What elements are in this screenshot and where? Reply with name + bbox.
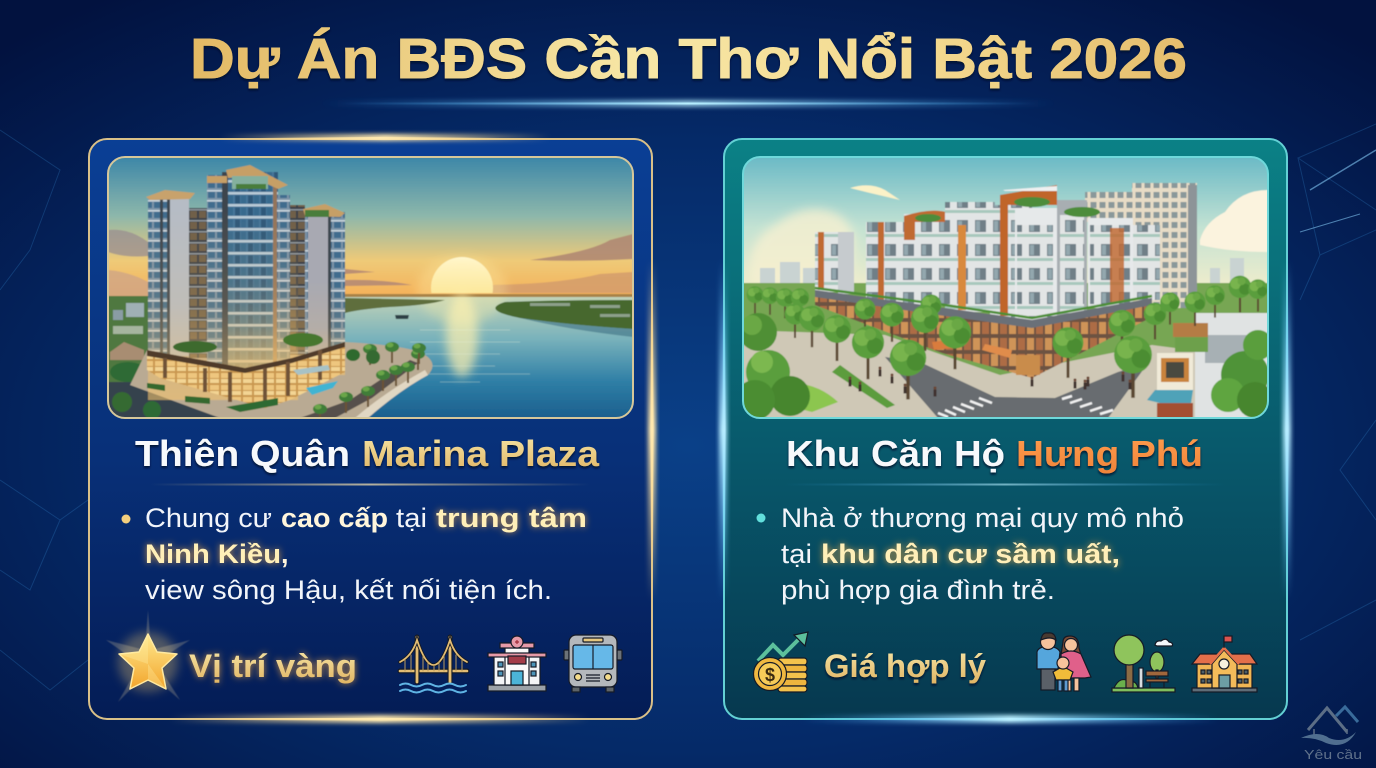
panel: Thiên Quân Marina Plaza <box>89 134 656 723</box>
icon: star <box>106 610 190 702</box>
foreground trees <box>739 313 777 351</box>
right facade blocks <box>1130 225 1160 300</box>
bullet text: tại <box>781 539 812 569</box>
pavement and road <box>744 330 1196 417</box>
bullet text: view sông Hậu, kết nối tiện ích. <box>145 575 552 605</box>
heading underline <box>150 484 590 486</box>
title: Dự Án BĐS Cần Thơ Nổi Bật 2026 <box>190 27 1187 91</box>
icon: coins with rising arrow <box>754 632 808 692</box>
bullet text: cao cấp <box>281 503 388 533</box>
bullet text: trung tâm <box>436 503 587 533</box>
center tower <box>206 174 223 364</box>
project name <box>135 433 600 474</box>
project name: Thiên Quân <box>135 433 350 474</box>
bullet text: tại <box>396 503 427 533</box>
right wing <box>305 212 345 357</box>
icon: park <box>1112 635 1175 692</box>
icon: hospital <box>488 636 546 691</box>
bullet text <box>122 503 587 605</box>
bullet text: phù hợp gia đình trẻ. <box>781 575 1055 605</box>
panel background <box>719 139 1291 723</box>
icon: school <box>1192 636 1257 692</box>
left wing <box>147 199 168 354</box>
image: riverside tower at sunset <box>108 157 633 425</box>
icon: family <box>1037 633 1091 691</box>
title glow divider <box>320 100 1056 107</box>
icon: bus <box>564 635 622 692</box>
icon: bridge <box>400 637 467 692</box>
left facade blocks <box>814 232 839 293</box>
project name: Khu Căn Hộ <box>786 433 1005 474</box>
bullet text: , <box>281 539 289 569</box>
towers behind <box>1132 183 1197 308</box>
bullet text: Nhà ở thương mại quy mô nhỏ <box>781 503 1184 533</box>
badge: Giá hợp lý <box>754 632 986 692</box>
bullet text <box>756 503 1184 605</box>
right houses <box>1195 313 1268 418</box>
bullet text: khu dân cư sầm uất, <box>821 539 1120 569</box>
podium shops <box>815 293 1152 378</box>
pedestrians <box>848 376 852 386</box>
far trees <box>747 286 763 314</box>
label: Giá hợp lý <box>824 648 986 684</box>
icon: coins with rising arrow: $ <box>765 665 775 685</box>
bullet text: Chung cư <box>145 503 272 533</box>
project name <box>786 433 1203 474</box>
watermark logo <box>1301 707 1362 762</box>
label: Vị trí vàng <box>189 648 357 684</box>
panel: Khu Căn Hộ Hưng Phú <box>719 139 1291 723</box>
badge: Vị trí vàng <box>106 610 357 702</box>
heading underline <box>785 484 1225 486</box>
podium <box>173 341 217 353</box>
panel background <box>89 134 656 723</box>
project name: Hưng Phú <box>1016 433 1203 474</box>
watermark logo: Yêu cầu <box>1304 747 1362 762</box>
image: apartments and street <box>735 157 1273 420</box>
bullet text: Ninh Kiều <box>145 539 281 569</box>
street trees <box>784 304 806 338</box>
project name: Marina Plaza <box>362 433 600 474</box>
